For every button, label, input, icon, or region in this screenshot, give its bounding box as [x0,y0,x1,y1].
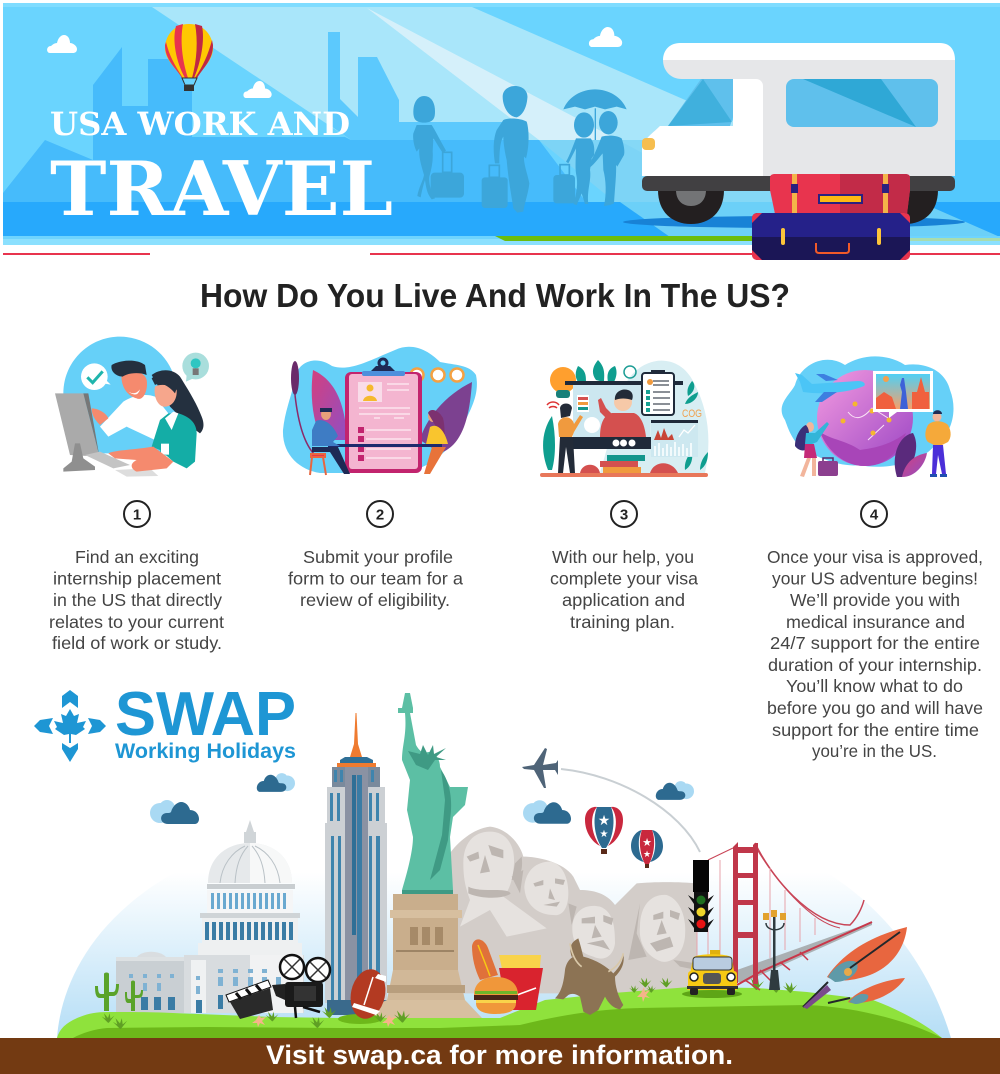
step 4 text: you’re in the US. [812,741,937,761]
presidents' faces [460,832,685,962]
flight trail [561,769,700,852]
banner: travel hero [3,3,1000,260]
COG label: COG [682,408,702,420]
step 1 text: field of work or study. [52,633,222,653]
woman [152,370,203,468]
Statue of Liberty [372,693,482,1018]
hands on keyboard [108,447,173,472]
Charging Bull [555,938,624,1015]
step 1 text: Find an exciting [75,547,199,567]
sun [550,367,576,393]
step 3 illustration: online visa training [540,360,708,477]
step 4 illustration: adventure globe [782,356,954,477]
fries [499,955,543,1010]
computer [55,393,158,477]
cloud [523,800,571,824]
step 4 number [861,501,887,527]
step 4 text: before you go and will have [767,698,983,718]
step 2 text: Submit your profile [303,547,453,567]
flowers [252,987,650,1027]
step 1 number [124,501,150,527]
icon: maple leaf with arrows [34,690,106,762]
step 3 text [550,547,698,632]
cab window [668,79,733,126]
balloon: ★ [598,813,610,829]
bulb bubble [182,353,209,382]
title: TRAVEL [50,145,393,233]
balloon: ★ [600,829,609,840]
step 2 text [288,547,463,610]
step 1 text: internship placement [53,568,221,588]
headlight [642,138,655,150]
woman seated [424,410,448,474]
step 4 text: medical insurance and [786,612,965,632]
balloon: ★ [642,836,652,849]
presenter screen [565,381,683,449]
cloud [47,35,77,53]
step 1 text: in the US that directly [53,590,222,610]
Golden Gate Bridge [697,842,872,990]
traveler silhouettes [413,86,627,213]
traveler with bag [482,86,529,213]
table [328,444,442,447]
checklist [642,370,674,415]
step 1 number: 1 [133,506,141,524]
globe [817,370,913,466]
wifi icon [547,402,559,408]
step 4 text: your US adventure begins! [772,568,978,588]
US Capitol [116,820,304,1013]
icon: hot air balloon [165,24,213,91]
van [623,43,965,228]
chart panel [651,420,698,457]
logo tagline: Working Holidays [115,740,296,763]
scene: American landmarks [57,693,951,1038]
film camera [272,955,330,1018]
title: USA WORK AND [50,105,350,143]
cloud [656,781,694,800]
step 4 number: 4 [870,506,879,524]
leaf plant [895,433,927,477]
background halo [57,818,951,1038]
skyline [3,32,586,202]
step 2 illustration: profile form clipboard [283,347,477,475]
cloud [243,81,272,98]
Empire State Building [325,713,389,1015]
step 1 text [49,547,224,653]
balloon: ★ [643,850,651,860]
footer bar [0,1038,1000,1074]
step 1 illustration: advisor and intern at computer [55,337,209,477]
horizon band [780,140,1000,202]
suitcases [752,174,910,260]
step 3 number: 3 [620,506,628,524]
lamp post [763,910,786,990]
ground hill [57,987,942,1038]
side window [786,79,938,127]
check bubble [81,363,111,390]
airplane [795,373,865,402]
clapperboard [226,980,273,1019]
city postcard [873,371,933,418]
step 4 text: 24/7 support for the entire [770,633,980,653]
step 2 text: form to our team for a [288,568,463,588]
grass tufts [102,978,797,1029]
cacti [95,972,143,1011]
step 4 text: support for the entire time [772,720,979,740]
step 2 text: review of eligibility. [300,590,450,610]
heading: How Do You Live And Work In The US? [200,277,790,314]
base [540,473,708,477]
orange rings [410,368,464,382]
step 1 text: relates to your current [49,612,224,632]
leaves [543,360,708,470]
step 4 text [767,547,983,761]
capitol lower windows [141,922,293,1013]
logo: SWAP Working Holidays [34,680,296,763]
capitol colonnade windows [211,893,286,909]
leaves [291,361,472,455]
cloud [257,773,295,792]
woman presenter [556,390,589,473]
logo wordmark: SWAP [115,680,296,749]
step 4 text: duration of your internship. [768,655,982,675]
flower fans [580,463,678,473]
ground band [3,202,1000,236]
airplane [522,748,558,788]
footer text: Visit swap.ca for more information. [266,1040,733,1070]
feathers [803,927,907,1009]
balloon [631,830,663,868]
suitcase [818,458,838,476]
step 3 text: application and [562,590,685,610]
football [346,966,390,1022]
step 3 number [611,501,637,527]
red suitcase [770,174,910,214]
woman [795,422,829,477]
step 3 text: complete your visa [550,568,698,588]
burger [474,977,518,1014]
step 4 text: Once your visa is approved, [767,547,983,567]
traffic light [688,860,714,932]
ground strips [3,236,1000,245]
navy suitcase [752,213,910,260]
step 4 text: You’ll know what to do [786,676,963,696]
balloon [584,806,624,854]
capitol facade windows [129,969,281,994]
food [472,939,543,1014]
step 3 text: training plan. [570,612,675,632]
carved facial features [467,845,697,970]
step 3 text: With our help, you [552,547,694,567]
books [600,455,645,473]
step 2 number [367,501,393,527]
couple under umbrella [553,89,627,206]
red rules [3,253,1000,255]
step 4 text: We’ll provide you with [790,590,960,610]
light beam [152,7,1000,237]
man [92,361,168,440]
man [925,410,951,477]
clipboard [345,359,422,473]
taxi [682,950,742,998]
man seated [310,408,350,475]
step 2 number: 2 [376,506,384,524]
facade stripes [330,770,380,1001]
traveler with suitcase [413,96,464,199]
cloud [589,27,622,47]
wheels [658,190,938,224]
hot dog [472,939,498,980]
globe icon [624,366,636,378]
clouds [150,800,199,824]
title [50,105,393,233]
Mount Rushmore [450,827,697,993]
